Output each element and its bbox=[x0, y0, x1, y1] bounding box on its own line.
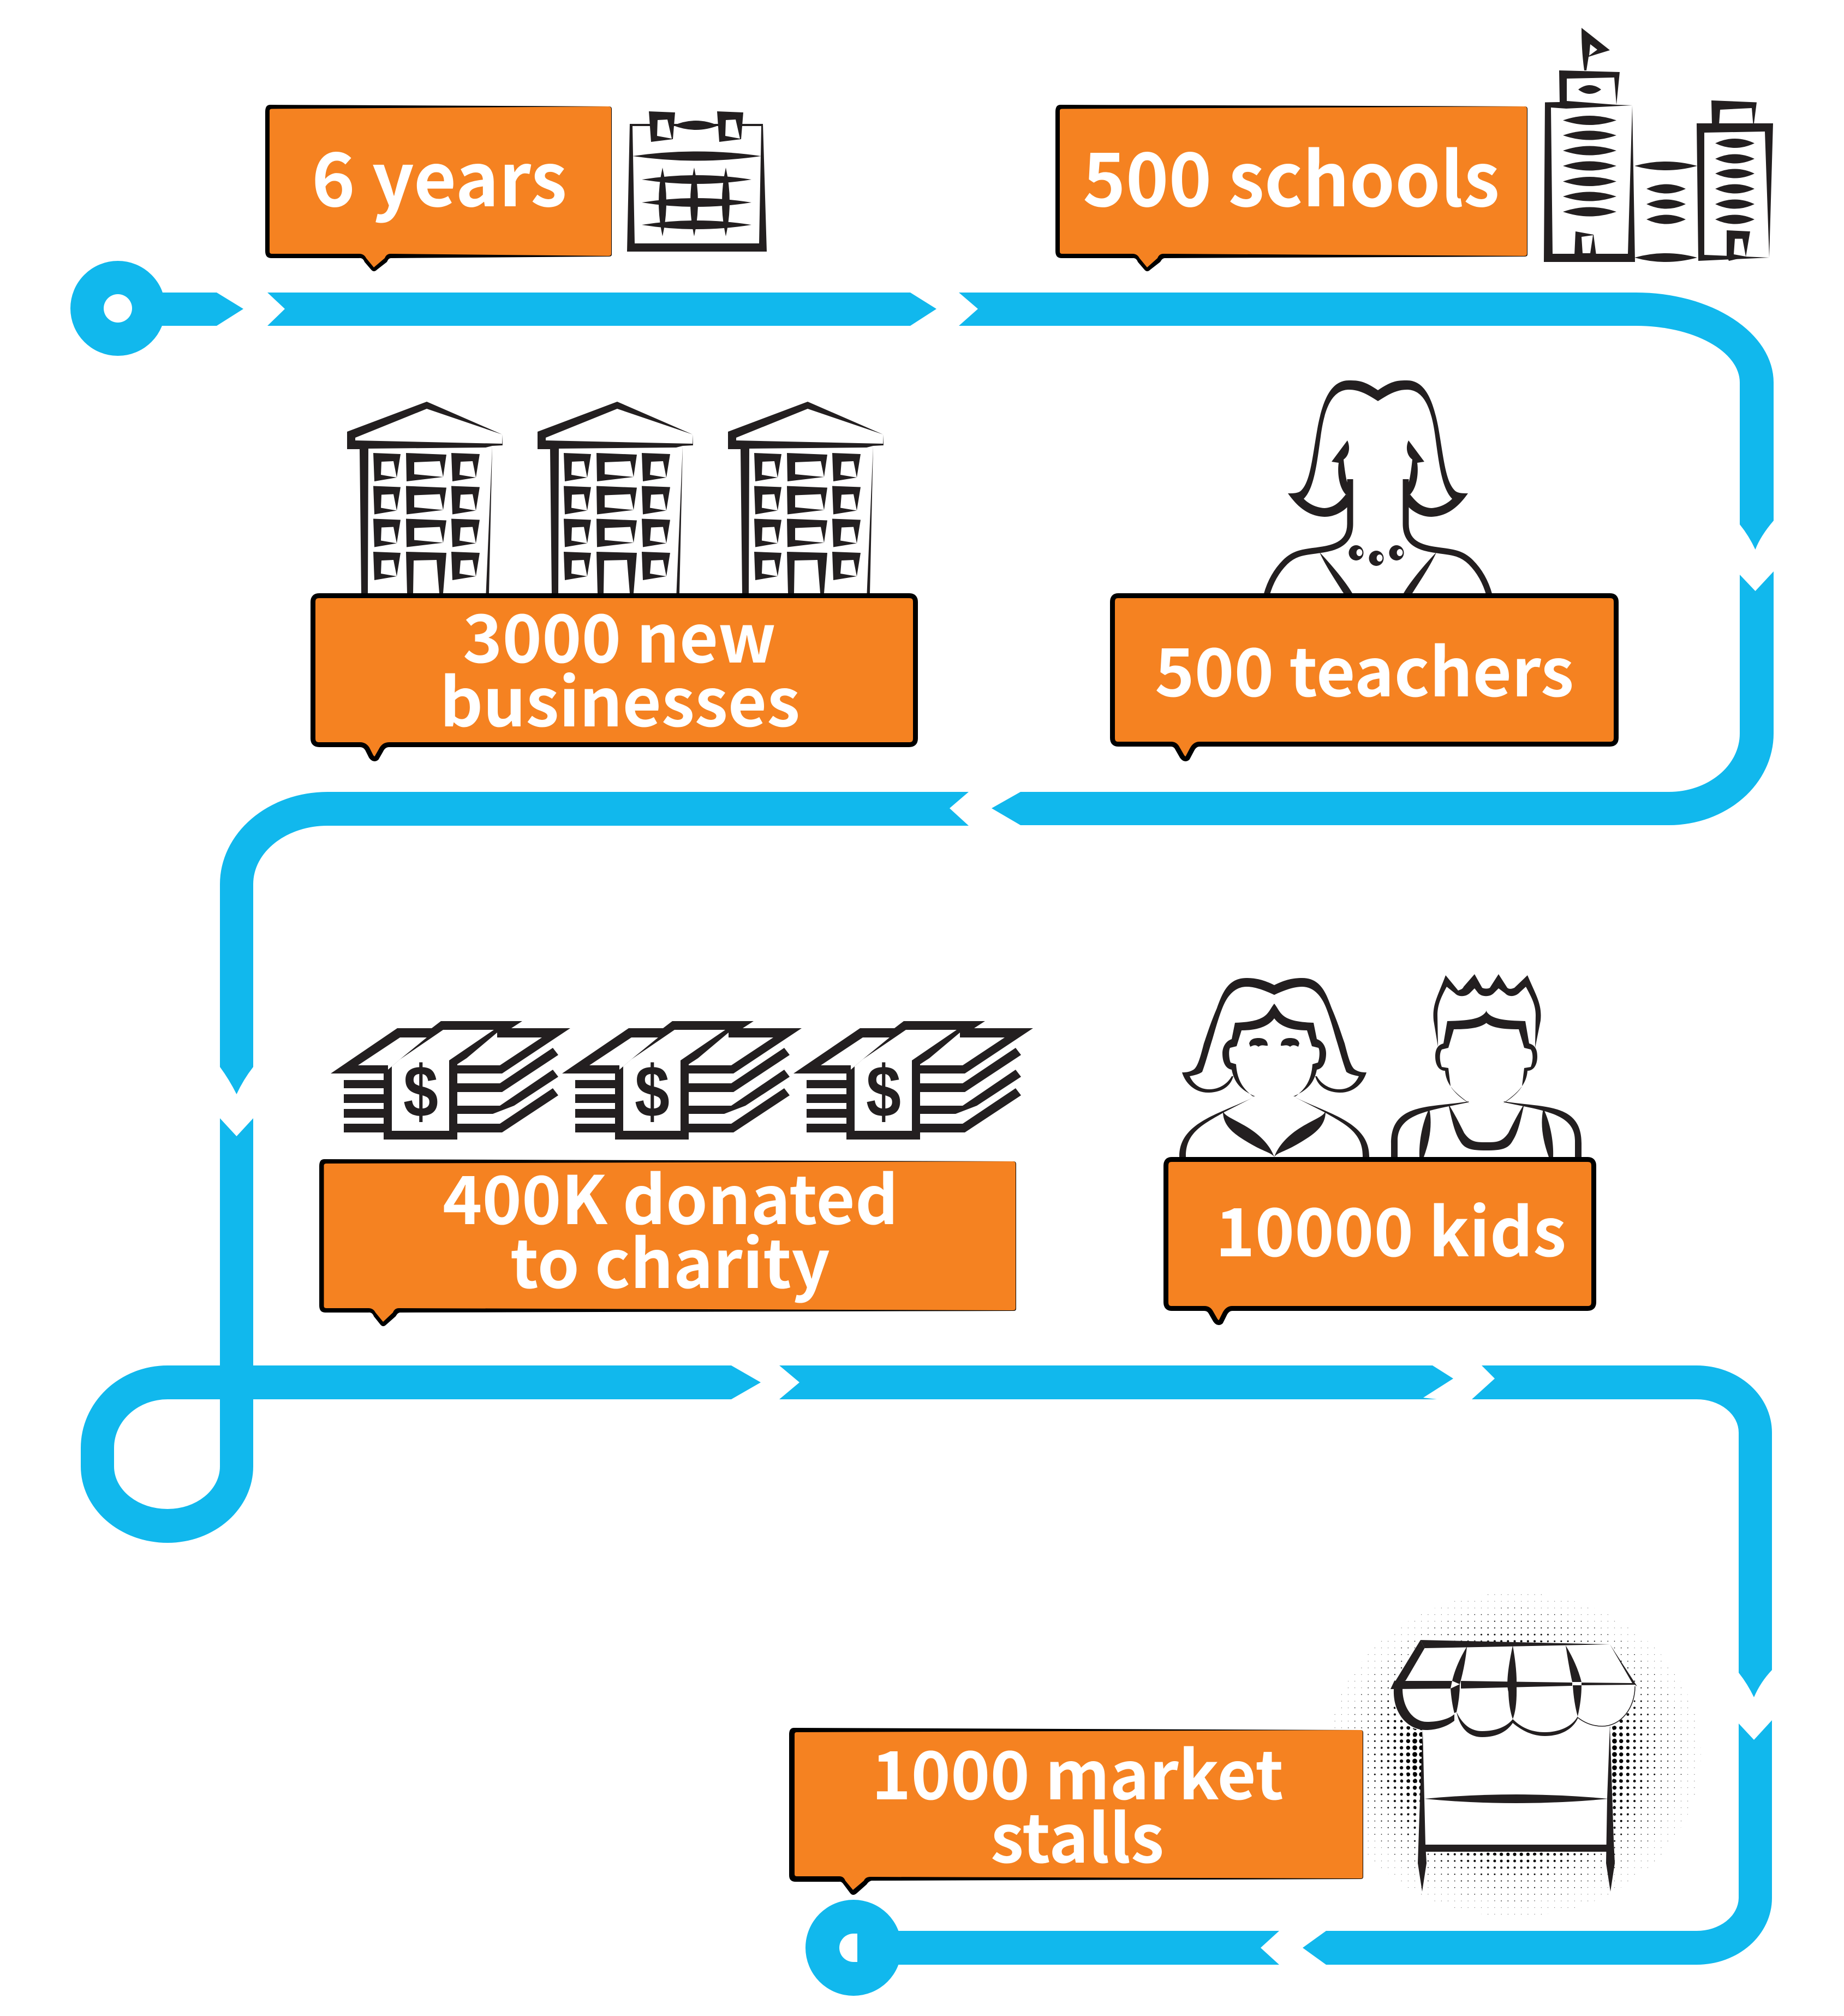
start marker bbox=[70, 261, 243, 356]
panel: 500 schools bbox=[1055, 28, 1773, 271]
ribbon segment: loop bbox=[81, 1118, 253, 1543]
icon: school buildings bbox=[1544, 28, 1773, 262]
label: 10000 kids bbox=[1215, 1179, 1566, 1276]
panel: 3000 new businesses bbox=[313, 402, 916, 759]
panel: 1000 market stalls bbox=[789, 1592, 1701, 1917]
callout box bbox=[319, 1159, 1016, 1326]
panel: 6 years bbox=[265, 105, 767, 271]
panel: 10000 kids bbox=[1166, 974, 1594, 1322]
callout box bbox=[789, 1728, 1363, 1895]
end marker bbox=[805, 1900, 1279, 1996]
panel: 500 teachers bbox=[1112, 380, 1616, 759]
icon: two kids bbox=[1179, 974, 1582, 1157]
icon: market stall bbox=[1391, 1640, 1637, 1892]
label: 400K donated bbox=[443, 1147, 898, 1244]
label line 2: businesses bbox=[440, 649, 800, 746]
label: 500 schools bbox=[1083, 121, 1500, 228]
icon: teacher bbox=[1267, 380, 1489, 595]
label line 2: to charity bbox=[510, 1211, 830, 1308]
icon: three office buildings bbox=[347, 402, 884, 593]
ribbon segment: top right corner bbox=[959, 293, 1774, 550]
label: 3000 new bbox=[463, 586, 776, 682]
label: 1000 market bbox=[872, 1722, 1284, 1819]
halftone dots bbox=[1328, 1592, 1701, 1917]
callout box bbox=[1166, 1159, 1594, 1322]
ribbon segment: bottom right corner bbox=[1303, 1720, 1772, 1965]
ribbon segment: row two to left side bbox=[220, 792, 969, 1094]
callout box bbox=[1055, 105, 1527, 271]
timeline ribbon bbox=[70, 261, 1774, 1996]
ribbon segment: row three middle bbox=[779, 1365, 1453, 1399]
callout box bbox=[1112, 596, 1616, 759]
ribbon segment: row three right corner bbox=[1472, 1365, 1772, 1697]
callout box bbox=[313, 596, 916, 759]
icon: calendar bbox=[627, 111, 767, 252]
icon: three money stacks bbox=[331, 1021, 1033, 1140]
panel: 400K donated to charity bbox=[319, 1021, 1033, 1326]
label line 2: stalls bbox=[990, 1786, 1164, 1882]
label: 6 years bbox=[312, 121, 567, 228]
ribbon segment: row three left bbox=[168, 1365, 761, 1399]
callout box bbox=[265, 105, 612, 271]
ribbon segment: right side to row two bbox=[992, 571, 1774, 825]
label: 500 teachers bbox=[1155, 619, 1574, 716]
ribbon segment: row one bbox=[267, 293, 936, 326]
